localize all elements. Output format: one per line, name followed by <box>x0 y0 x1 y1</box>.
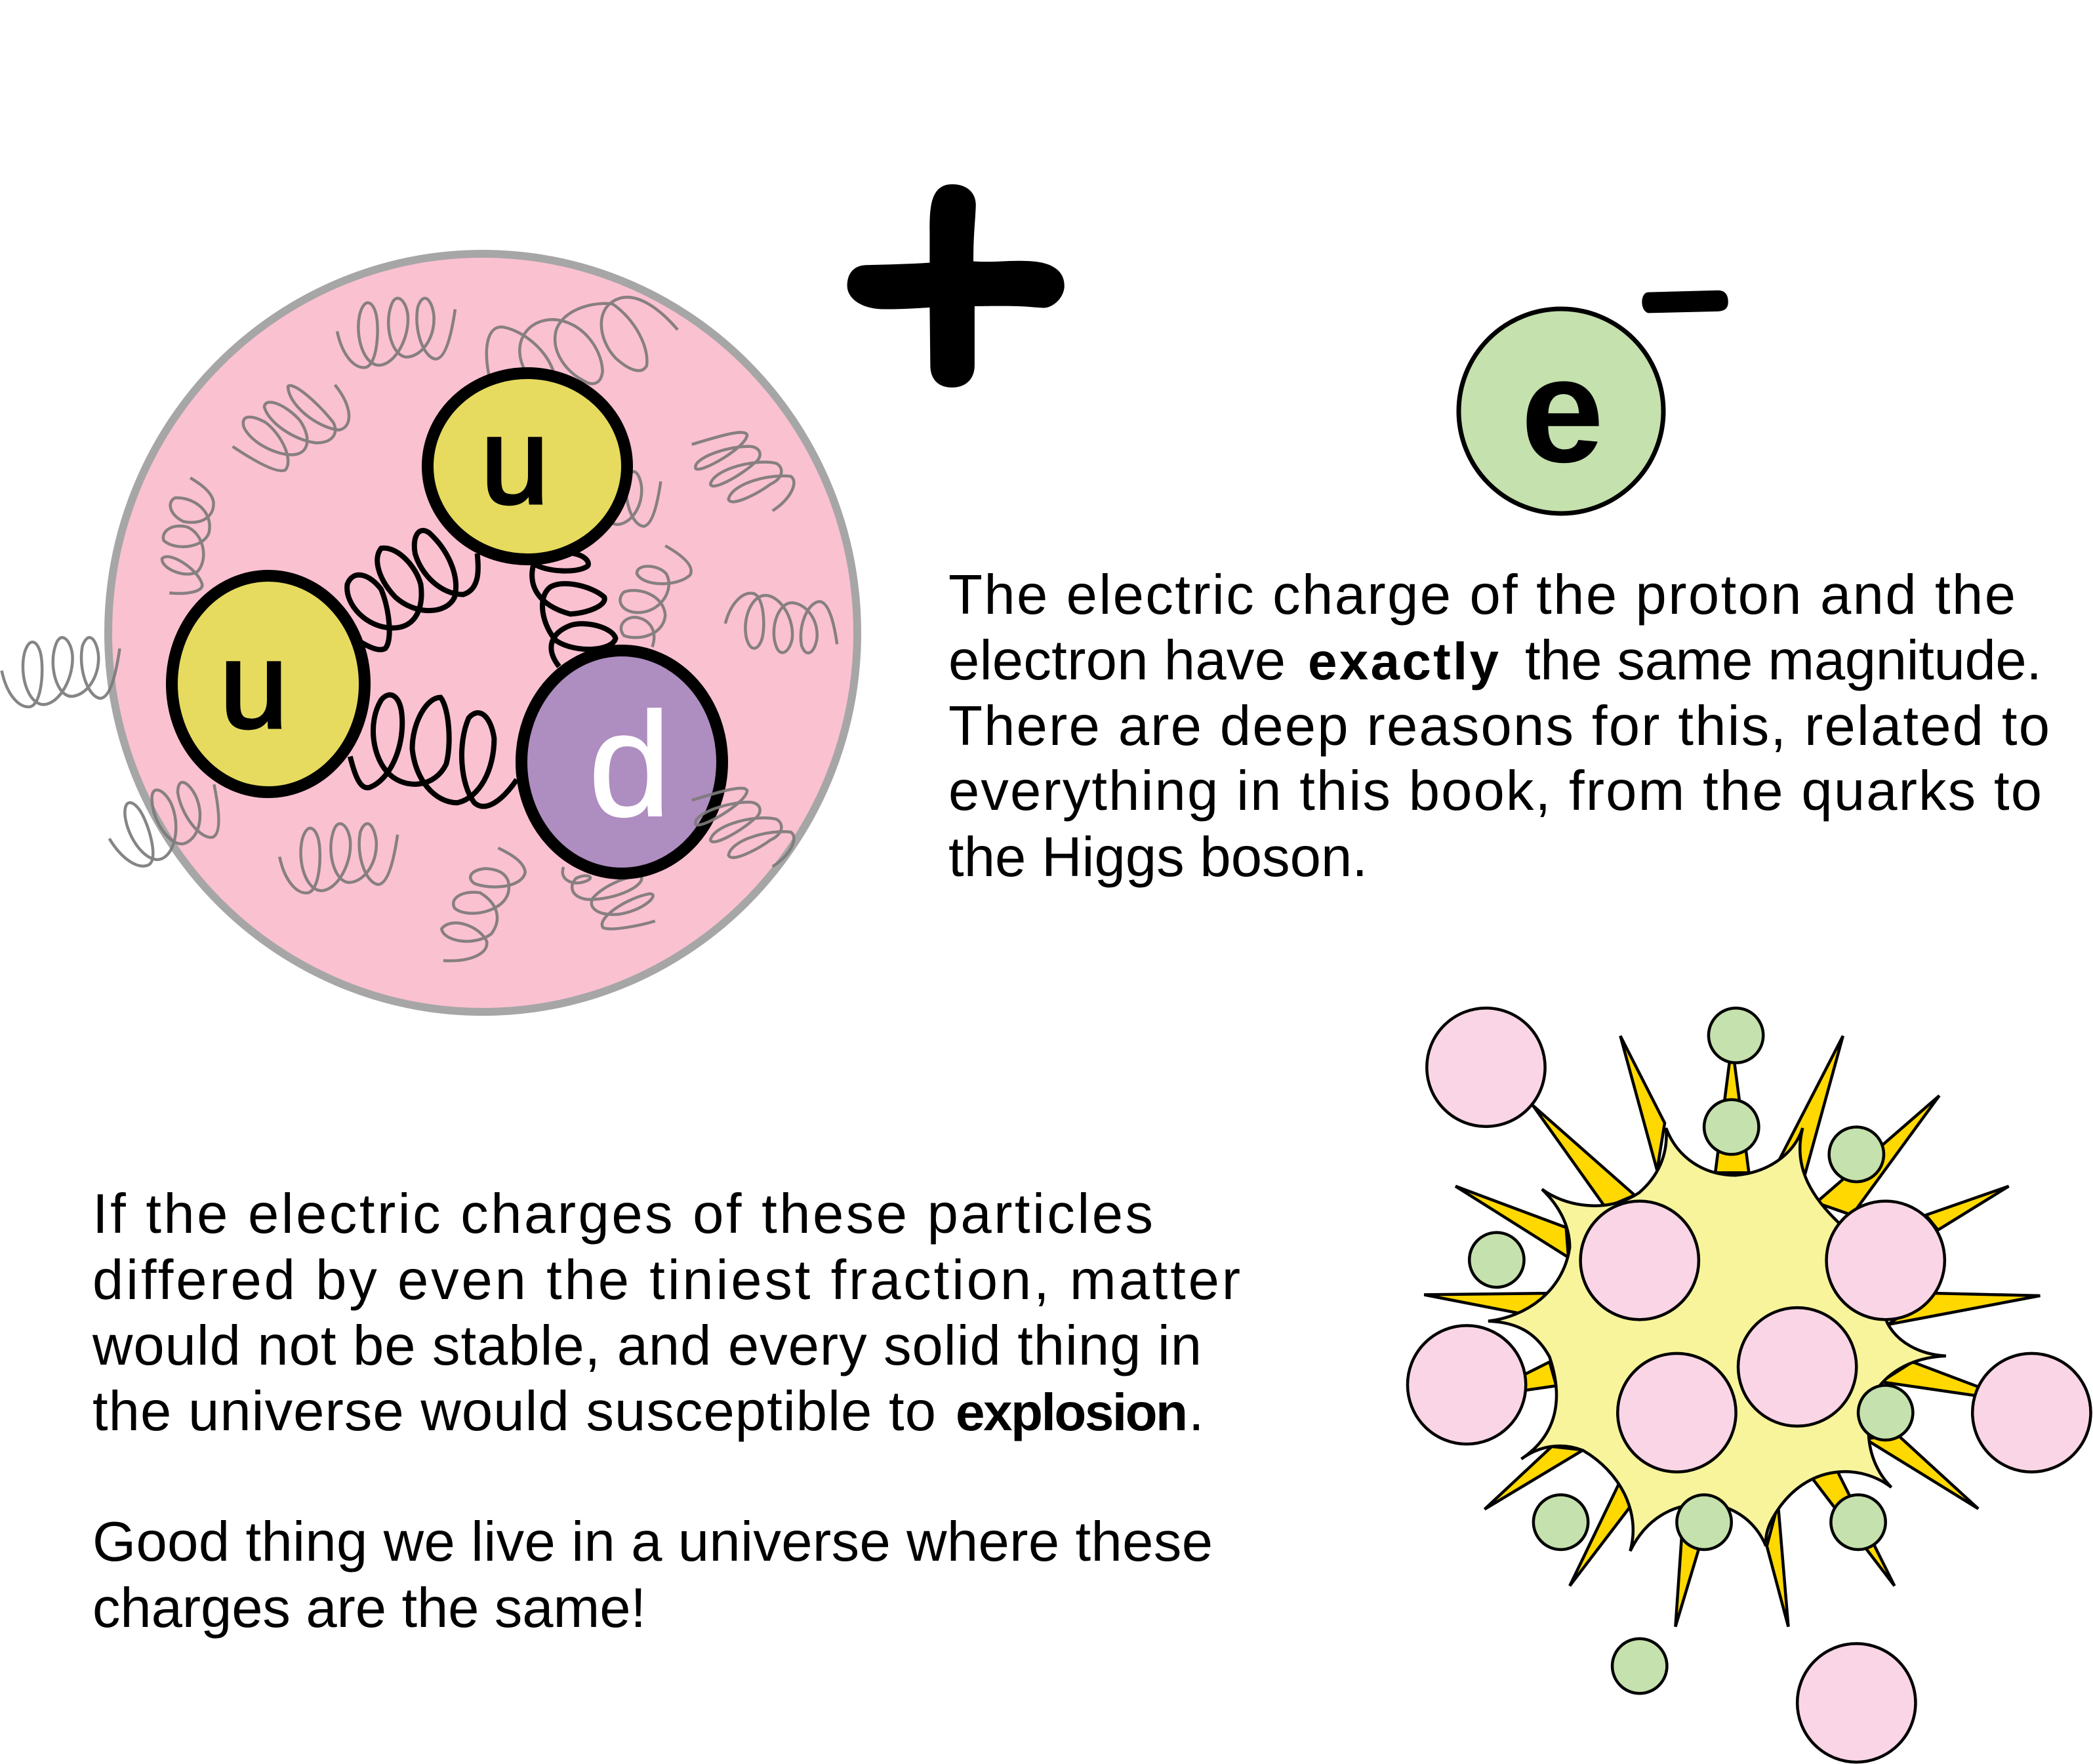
electron circle <box>1459 309 1663 513</box>
text: charge magnitude: electron have <box>948 630 1286 692</box>
gluon over down quark <box>692 788 794 866</box>
green particles <box>1469 1008 1913 1693</box>
text: explosion explanation <box>92 1183 1240 1639</box>
text: charge magnitude: everything in this book, from the quarks to <box>948 760 2042 822</box>
text: explosion explanation: . <box>1189 1380 1204 1443</box>
proton diagram <box>2 254 857 1012</box>
burst spikes <box>1424 1036 2040 1627</box>
burst core <box>1488 1128 1946 1551</box>
minus sign <box>1642 291 1728 313</box>
text: charge magnitude: the Higgs boson. <box>948 826 1368 889</box>
text: explosion explanation: If the electric charges of these particles <box>92 1183 1153 1245</box>
text: explosion explanation: the universe would susceptible to <box>92 1380 936 1443</box>
explosion illustration <box>1408 1008 2091 1762</box>
sea gluons <box>2 297 838 961</box>
electron letter: e <box>1521 327 1604 494</box>
up quark top <box>428 373 627 559</box>
text: charge magnitude: There are deep reasons for this, related to <box>948 695 2050 757</box>
up quark top: u <box>481 393 549 529</box>
text: charge magnitude: the same magnitude. <box>1525 630 2042 692</box>
pink particles <box>1408 1008 2091 1762</box>
proton body circle <box>108 254 857 1012</box>
binding gluons <box>347 531 615 807</box>
down quark <box>521 651 722 873</box>
up quark left <box>172 576 365 792</box>
text: charge magnitude <box>948 564 2050 889</box>
text: charge magnitude: The electric charge of the proton and the <box>948 564 2016 626</box>
text: explosion explanation: explosion <box>956 1383 1188 1441</box>
electron <box>1459 291 1728 513</box>
up quark left: u <box>220 618 288 753</box>
plus sign <box>847 184 1065 388</box>
down quark: d <box>588 681 671 847</box>
text: explosion explanation: differed by even the tiniest fraction, matter <box>92 1249 1240 1312</box>
text: explosion explanation: would not be stable, and every solid thing in <box>92 1315 1202 1377</box>
text: charge magnitude: exactly <box>1308 632 1499 691</box>
text: explosion explanation: charges are the same! <box>92 1577 646 1639</box>
text: explosion explanation: Good thing we live in a universe where these <box>92 1511 1213 1573</box>
